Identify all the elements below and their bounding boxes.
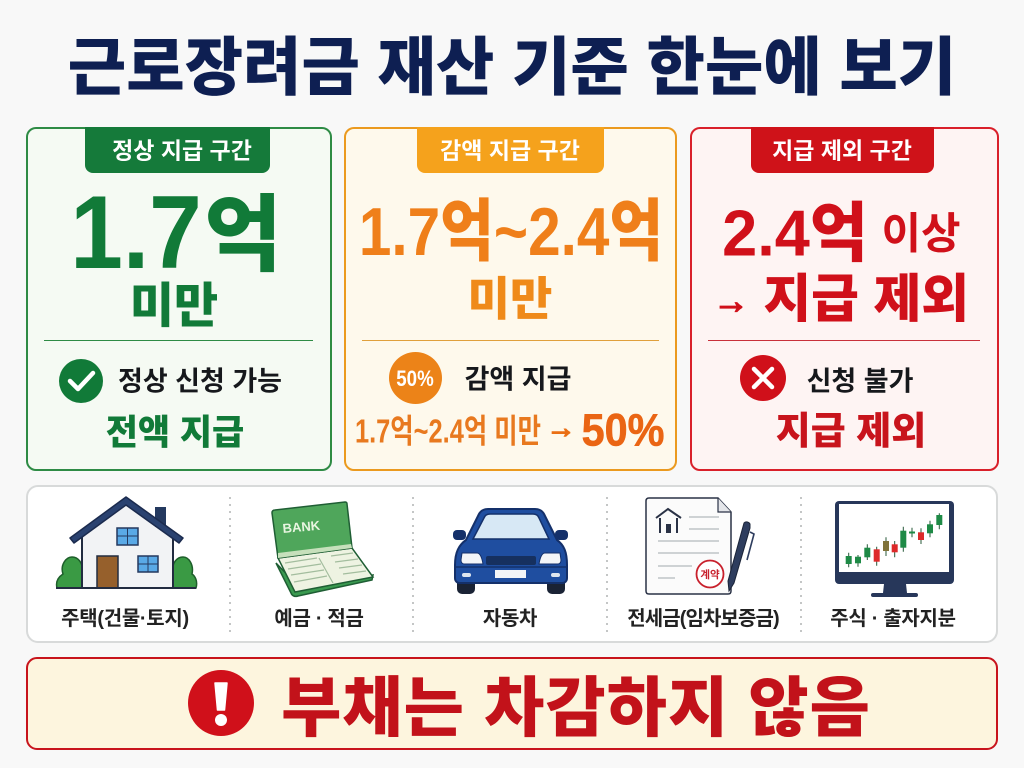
title: 근로장려금 재산 기준 한눈에 보기: [68, 33, 956, 103]
reduction detail: 1.7억~2.4억 미만: [355, 412, 541, 450]
amount: under 1.7: 억: [204, 188, 282, 282]
amount: under 1.7: 1.7: [70, 175, 202, 291]
badge: normal: 정상 지급 구간: [112, 138, 252, 164]
reduction detail: →: [546, 412, 576, 444]
label: deposit: 전세금(임차보증금): [627, 608, 779, 630]
status text: 정상 신청 가능: [118, 366, 282, 396]
amount: 1.7 to 2.4: 1.7억~2.4억: [359, 194, 663, 270]
amount suffix: 미만: [130, 280, 218, 333]
icon: car: [453, 508, 568, 594]
label: house: 주택(건물·토지): [61, 608, 189, 630]
icon: 50 percent: 50%: [396, 366, 434, 391]
label: stocks: 주식 · 출자지분: [830, 608, 956, 630]
panel: assets: [26, 485, 998, 643]
icon: bankbook: BANK: [282, 518, 321, 536]
payout text: 지급 제외: [776, 411, 926, 453]
icon: house: [56, 496, 198, 589]
panel: normal payment: [26, 127, 332, 471]
icon: contract: 계약: [700, 567, 720, 582]
badge: normal: [85, 127, 270, 173]
badge: excluded: [751, 127, 934, 173]
reduction detail: 50%: [582, 404, 664, 456]
icon: check: [59, 359, 103, 403]
amount: 2.4 or more: 2.4억: [722, 196, 868, 270]
panel: reduced payment: [344, 127, 677, 471]
badge: reduced: 감액 지급 구간: [440, 138, 580, 164]
amount: under 1.7: [70, 175, 282, 291]
payout text: 전액 지급: [106, 414, 244, 452]
status text: 감액 지급: [465, 364, 571, 394]
icon: stock monitor: [835, 501, 954, 597]
amount: 2.4 or more: [722, 196, 961, 270]
reduction detail: [355, 404, 664, 456]
banner: debt not deducted: [26, 657, 998, 750]
status text: 신청 불가: [807, 366, 913, 396]
icon: exclamation: [188, 670, 254, 736]
icon: cross: [740, 355, 786, 401]
badge: excluded: 지급 제외 구간: [772, 138, 912, 164]
icon: contract: [645, 497, 755, 595]
label: savings: 예금 · 적금: [274, 608, 364, 630]
badge: reduced: [417, 127, 604, 173]
icon: 50 percent: [389, 352, 442, 404]
panel: excluded: [690, 127, 999, 471]
amount: 2.4 or more: 이상: [881, 210, 961, 258]
label: car: 자동차: [483, 608, 537, 630]
banner text: 부채는 차감하지 않음: [281, 671, 871, 744]
amount suffix: 미만: [468, 273, 552, 325]
excluded heading: → 지급 제외: [713, 271, 969, 329]
icon: bankbook: [271, 501, 374, 598]
